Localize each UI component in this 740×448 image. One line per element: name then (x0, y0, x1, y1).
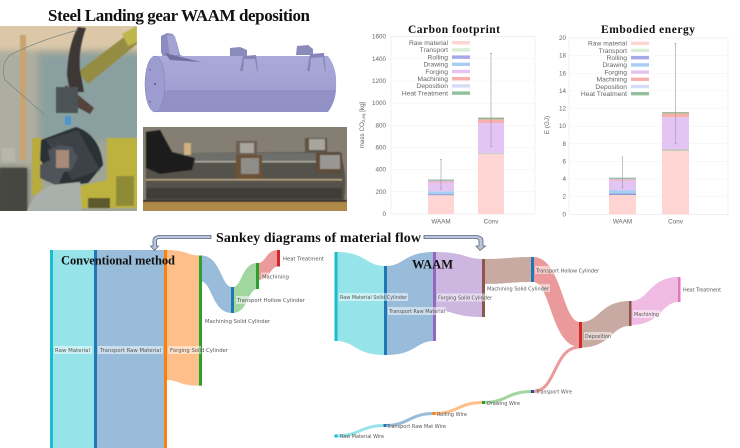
legend: Deposition (595, 84, 627, 91)
label: Machining Solid Cylinder (487, 284, 550, 292)
y axis ticks: 0 (382, 211, 386, 218)
nodes (334, 252, 680, 438)
y axis title: E (GJ) (544, 116, 551, 134)
y axis ticks (559, 35, 566, 218)
x axis labels: WAAM (431, 218, 451, 226)
y axis ticks: 1000 (372, 100, 386, 107)
y axis ticks: 16 (559, 70, 566, 77)
legend: Deposition (416, 83, 448, 90)
y axis ticks: 800 (375, 122, 386, 129)
x axis labels: WAAM (613, 218, 632, 226)
label: Drawing Wire: Drawing Wire (487, 401, 520, 407)
legend: Transport (420, 47, 448, 54)
label: Machining Solid Cylinder: Machining Solid Cylinder (487, 286, 550, 292)
arrow: to conventional diagram (150, 236, 211, 250)
sankey: WAAM (334, 252, 721, 440)
photo: robot WAAM deposition cell (0, 26, 137, 211)
y axis ticks: 20 (559, 35, 566, 42)
legend: Raw material (588, 41, 628, 48)
x axis labels: Conv (484, 218, 499, 226)
y axis ticks: 1400 (372, 56, 386, 63)
x axis labels (431, 218, 499, 226)
plot area (569, 38, 728, 214)
y axis title: [kg] (359, 101, 366, 114)
chart title: embodied energy: Embodied energy (601, 24, 695, 36)
label: Heat Treatment: Heat Treatment (283, 256, 324, 262)
label: Raw Material (54, 346, 92, 354)
chart: embodied energy (544, 24, 728, 226)
y axis ticks: 14 (559, 88, 566, 95)
legend: Transport (599, 48, 627, 55)
label: Forging Solid Cylinder: Forging Solid Cylinder (438, 296, 493, 302)
y axis title: mass CO (359, 122, 366, 148)
legend: Rolling (607, 55, 627, 62)
x axis labels (613, 218, 684, 226)
sankey: conventional method (50, 250, 324, 448)
plot area (391, 37, 535, 214)
legend: Machining (597, 77, 627, 84)
label: Forging Solid Cylinder: Forging Solid Cylinder (170, 348, 229, 354)
CAD model of cylinder with lugs (145, 33, 336, 112)
y axis ticks: 6 (562, 158, 566, 165)
photo: deposited steel cylinder (143, 127, 347, 211)
y axis ticks: 400 (375, 167, 386, 174)
label: Transport Hollow Cylinder: Transport Hollow Cylinder (535, 268, 600, 274)
legend: Heat Treatment (402, 90, 448, 97)
flow bands (336, 252, 679, 436)
chart title: carbon footprint: Carbon footprint (408, 24, 500, 36)
legend (581, 41, 649, 98)
nodes (50, 250, 280, 448)
label: Transport Raw Mat Wire: Transport Raw Mat Wire (386, 424, 446, 430)
y axis ticks: 200 (375, 189, 386, 196)
legend: Raw material (409, 40, 449, 47)
label: Machining: Machining (634, 312, 659, 318)
legend (402, 40, 470, 97)
label: Transport Raw Material: Transport Raw Material (99, 348, 161, 354)
label: Deposition: Deposition (585, 334, 611, 340)
label: Heat Treatment: Heat Treatment (683, 288, 721, 294)
y axis ticks: 1600 (372, 34, 386, 41)
chart: carbon footprint (359, 24, 535, 226)
WAAM stacked bar (428, 180, 454, 214)
label: Machining: Machining (262, 274, 289, 280)
legend: Forging (604, 69, 627, 76)
y axis ticks: 4 (562, 176, 566, 183)
legend: Machining (418, 76, 448, 83)
overlay title: WAAM: WAAM (412, 258, 453, 272)
legend: Rolling (428, 54, 448, 61)
Conv stacked bar (662, 112, 689, 214)
overlay title: Conventional method: Conventional method (61, 254, 175, 268)
y axis title: 2,eq (361, 113, 366, 122)
label: Raw Material: Raw Material (55, 348, 90, 354)
flow bands (52, 250, 278, 448)
legend: Drawing (602, 62, 627, 69)
legend: Drawing (423, 62, 448, 69)
legend: Heat Treatment (581, 91, 627, 98)
label: Transport Hollow Cylinder: Transport Hollow Cylinder (236, 298, 306, 304)
y axis ticks: 600 (375, 144, 386, 152)
y axis ticks: 18 (559, 53, 566, 60)
y axis ticks: 10 (559, 123, 566, 130)
y axis ticks: 8 (562, 141, 566, 148)
label: Raw Material Wire: Raw Material Wire (340, 434, 384, 440)
label: Transport Hollow Cylinder (535, 266, 600, 274)
error bars (440, 53, 492, 189)
y axis ticks (372, 34, 386, 218)
arrow: to WAAM diagram (424, 236, 486, 250)
label: Raw Material Solid Cylinder: Raw Material Solid Cylinder (340, 295, 408, 301)
y axis ticks: 1200 (372, 78, 386, 85)
y axis ticks: 2 (562, 194, 566, 201)
label: Rolling Wire: Rolling Wire (437, 412, 467, 418)
title: Steel Landing gear WAAM deposition (48, 6, 311, 25)
heading: Sankey diagrams of material flow: Sankey diagrams of material flow (216, 231, 422, 246)
label: Transport Wire: Transport Wire (535, 390, 572, 396)
legend: Forging (425, 69, 448, 76)
y axis ticks: 0 (562, 211, 566, 218)
error bars (622, 43, 676, 188)
x axis labels: Conv (668, 218, 684, 226)
label: Transport Raw Material: Transport Raw Material (388, 309, 445, 315)
label: Machining Solid Cylinder: Machining Solid Cylinder (205, 319, 271, 325)
y axis ticks: 12 (559, 106, 566, 112)
Conv stacked bar (478, 118, 504, 214)
WAAM stacked bar (609, 178, 636, 214)
label: Transport Raw Material (98, 346, 163, 354)
label: Forging Solid Cylinder (168, 346, 229, 354)
